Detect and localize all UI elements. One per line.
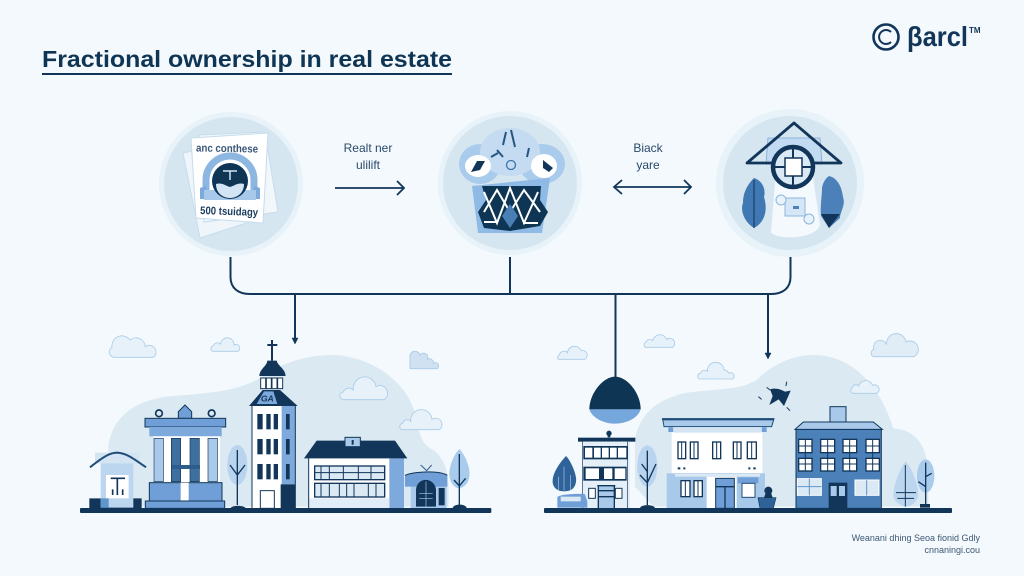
logo: TM (969, 26, 981, 35)
background hill (635, 355, 928, 507)
panel: house emblem circle (716, 109, 864, 257)
ground line (80, 508, 491, 513)
trees (893, 459, 934, 508)
building: clock tower: GA (261, 394, 274, 404)
icon: house emblem with leaves (742, 123, 844, 237)
building: columned bank (145, 405, 226, 508)
building: small pavilion (89, 453, 146, 508)
building: school house (304, 437, 407, 508)
background hill (108, 355, 449, 507)
icon: pot with flowers (459, 128, 565, 233)
icon: stacked certificate papers (183, 132, 278, 238)
panel: diamond pot circle (438, 111, 582, 255)
icon: bird (758, 382, 791, 411)
arrow: double headed (614, 180, 691, 194)
icon: pendant lamp (589, 377, 641, 424)
text: first arrow label: ulilift (356, 158, 381, 172)
connector lines (230, 257, 790, 378)
icon: stacked certificate papers: 500 tsuidagy (200, 205, 259, 219)
building: white shop (662, 418, 776, 508)
tree (227, 445, 247, 508)
text: first arrow label: Realt ner (344, 141, 392, 155)
building: small chapel (405, 465, 447, 508)
building: clock tower (249, 340, 298, 508)
title: Fractional ownership in real estate (42, 46, 452, 72)
building: small office (578, 431, 635, 508)
text: second arrow label: yare (636, 158, 660, 172)
logo (874, 21, 981, 52)
panel: right cityscape (544, 334, 952, 513)
tree and car (553, 456, 587, 508)
clouds (558, 334, 918, 393)
footer note: cnnaningi.cou (924, 545, 980, 555)
footer note: Weanani dhing Seoa fionid Gdly (852, 533, 980, 543)
building: blue apartments (795, 407, 882, 508)
arrow: right (335, 181, 404, 195)
tree (637, 445, 657, 508)
tree (449, 449, 470, 508)
ground line (544, 508, 952, 513)
text: second arrow label: Biack (633, 141, 664, 155)
logo: βarcl (907, 21, 968, 52)
icon: stacked certificate papers: anc conthese (196, 142, 258, 156)
panel: left cityscape (80, 336, 491, 513)
clouds (109, 336, 442, 430)
panel: document icon circle (159, 112, 303, 256)
